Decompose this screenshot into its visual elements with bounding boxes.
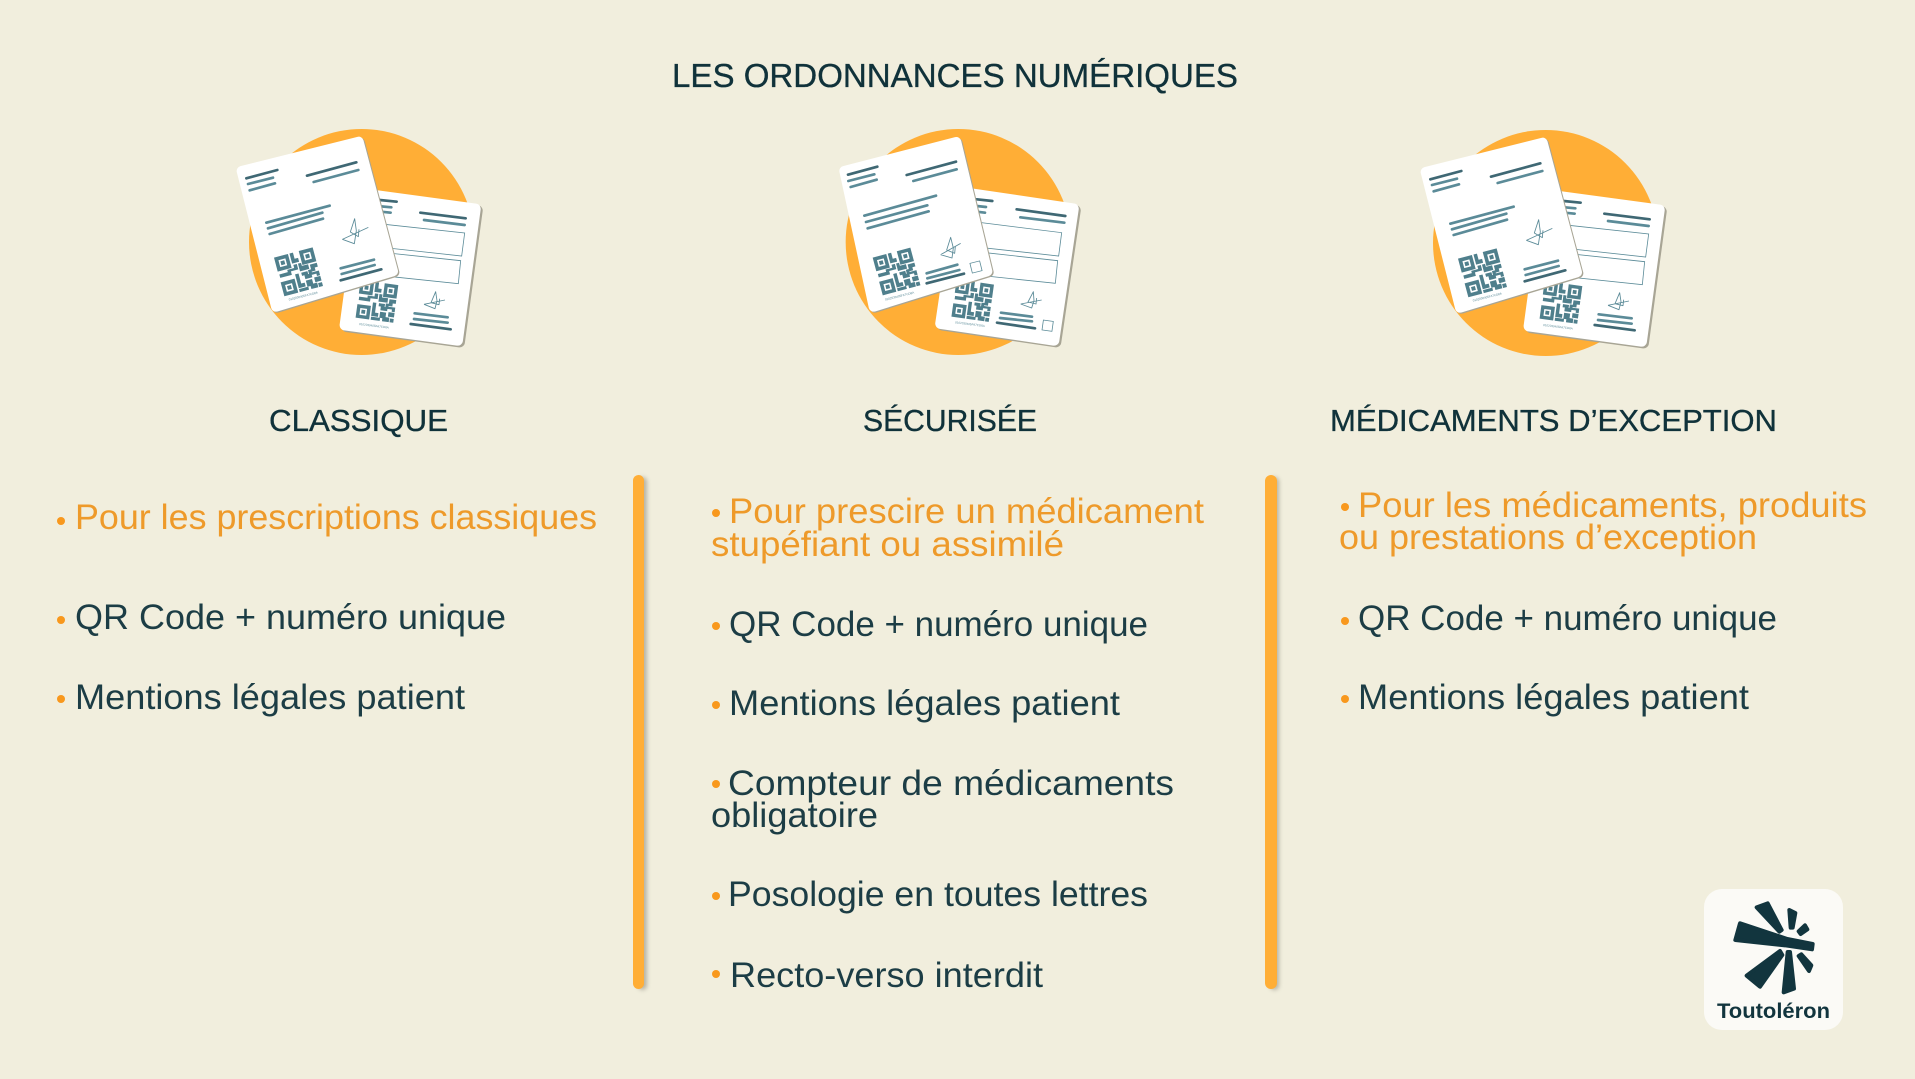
logo: Toutoléron: Toutoléron xyxy=(1717,1000,1830,1023)
list: médicaments d'exception xyxy=(1339,486,1867,717)
list: sécurisée: Compteur de médicaments xyxy=(728,764,1174,803)
list: classique: Mentions légales patient xyxy=(75,678,465,717)
icon: secure prescription documents: 0102030405FA7CD8A xyxy=(885,291,915,302)
list: médicaments d'exception: ou prestations d’exception xyxy=(1339,518,1757,557)
icon: secure prescription documents: 0102030405FA7CD8A xyxy=(955,320,985,328)
list: sécurisée: obligatoire xyxy=(711,796,878,835)
icon: exception medication documents xyxy=(1426,130,1667,356)
heading: sécurisée: SÉCURISÉE xyxy=(863,403,1037,438)
divider: right xyxy=(1265,475,1279,990)
list: sécurisée: QR Code + numéro unique xyxy=(729,605,1148,644)
list: sécurisée: stupéfiant ou assimilé xyxy=(711,525,1064,564)
list: sécurisée xyxy=(711,492,1204,995)
list: classique: Pour les prescriptions classiques xyxy=(75,498,597,537)
list: classique: QR Code + numéro unique xyxy=(75,598,506,637)
icon: classic prescription documents xyxy=(242,129,483,355)
title: LES ORDONNANCES NUMÉRIQUES xyxy=(672,57,1238,94)
list: médicaments d'exception: Mentions légales patient xyxy=(1358,678,1749,717)
list: sécurisée: Pour prescire un médicament xyxy=(729,492,1204,531)
heading: classique: CLASSIQUE xyxy=(269,403,448,438)
list: sécurisée: Mentions légales patient xyxy=(729,684,1120,723)
list: sécurisée: Posologie en toutes lettres xyxy=(728,875,1148,914)
divider: left xyxy=(633,475,647,990)
list: médicaments d'exception: Pour les médicaments, produits xyxy=(1358,486,1867,525)
heading: médicaments d'exception: MÉDICAMENTS D’EXCEPTION xyxy=(1330,403,1777,438)
icon: secure prescription documents xyxy=(844,129,1081,355)
list: médicaments d'exception: QR Code + numéro unique xyxy=(1358,599,1777,638)
list: sécurisée: Recto-verso interdit xyxy=(730,956,1043,995)
logo: Toutoléron xyxy=(1704,889,1843,1030)
list: classique xyxy=(57,498,597,717)
